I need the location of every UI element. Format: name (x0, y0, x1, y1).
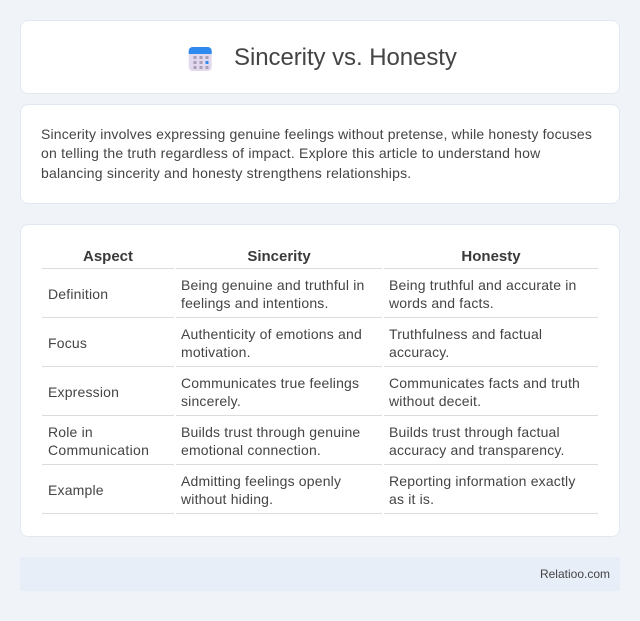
row: Focus (48, 326, 542, 360)
footer bar (20, 557, 620, 591)
row: Example: Admitting feelings openly (181, 473, 341, 489)
row: Role in Communication: Role in (48, 424, 93, 440)
row: Definition: words and facts. (389, 295, 494, 311)
row: Focus: Truthfulness and factual (389, 326, 542, 342)
row: Example: without hiding. (181, 491, 273, 507)
title: Sincerity vs. Honesty (234, 44, 457, 71)
column headers: Aspect (83, 248, 133, 265)
row: Expression: without deceit. (389, 393, 481, 409)
row: Role in Communication: accuracy and transparency. (389, 442, 565, 458)
row: Focus: Focus (48, 335, 87, 351)
column headers (83, 248, 521, 265)
intro text (41, 126, 592, 181)
icon: calendar (188, 47, 212, 71)
row: Definition (48, 277, 577, 311)
intro text: on telling the truth regardless of impact. Explore this article to understand how (41, 145, 540, 161)
row: Focus: accuracy. (389, 344, 450, 360)
row: Expression: Communicates true feelings (181, 375, 359, 391)
column headers: Sincerity (247, 248, 311, 265)
intro card (20, 104, 620, 204)
row: Example: Example (48, 482, 104, 498)
row: Expression: Communicates facts and truth (389, 375, 580, 391)
table card (20, 224, 620, 537)
row: Role in Communication: Communication (48, 442, 149, 458)
row: Example: Reporting information exactly (389, 473, 576, 489)
row: Definition: feelings and intentions. (181, 295, 329, 311)
row: Focus: Authenticity of emotions and (181, 326, 362, 342)
row: Expression (48, 375, 580, 409)
intro text: Sincerity involves expressing genuine feelings without pretense, while honesty focuses (41, 126, 592, 142)
row: Definition: Being truthful and accurate in (389, 277, 577, 293)
row: Definition: Definition (48, 286, 108, 302)
row: Example: as it is. (389, 491, 434, 507)
header card (20, 20, 620, 94)
row: Example (48, 473, 576, 507)
row: Role in Communication: Builds trust through factual (389, 424, 560, 440)
row: Definition: Being genuine and truthful in (181, 277, 364, 293)
row: Role in Communication (48, 424, 565, 458)
row: Role in Communication: Builds trust through genuine (181, 424, 360, 440)
row: Role in Communication: emotional connection. (181, 442, 321, 458)
row: Expression: Expression (48, 384, 119, 400)
intro text: balancing sincerity and honesty strengthens relationships. (41, 165, 411, 181)
column headers: Honesty (461, 248, 521, 265)
row: Expression: sincerely. (181, 393, 241, 409)
footer text: Relatioo.com (540, 567, 610, 581)
row: Focus: motivation. (181, 344, 251, 360)
